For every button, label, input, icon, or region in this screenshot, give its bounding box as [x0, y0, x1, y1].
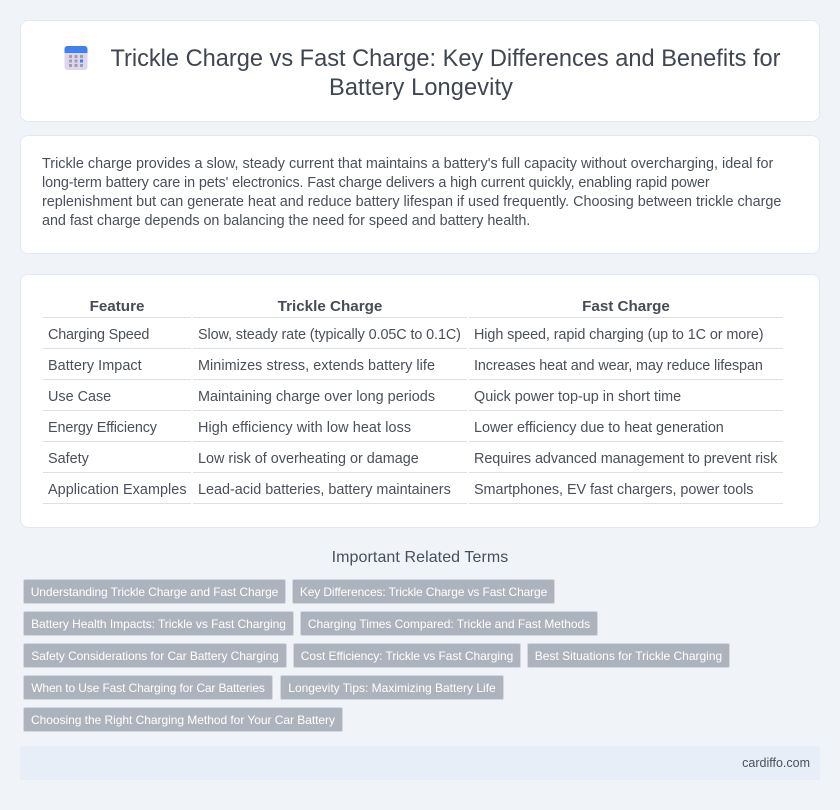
row: energy efficiency	[48, 420, 724, 436]
text block: introduction: long-term battery care in pets' electronics. Fast charge delivers a high current quickly, enabling rapid power	[42, 175, 710, 191]
row: use case	[48, 389, 681, 405]
table header: Trickle Charge	[278, 298, 382, 315]
row: battery impact: Battery Impact	[48, 358, 142, 374]
tag: Best Situations for Trickle Charging	[535, 649, 722, 663]
tag: Battery Health Impacts: Trickle vs Fast Charging	[31, 617, 286, 631]
row: energy efficiency: High efficiency with low heat loss	[198, 420, 411, 436]
panel: introduction	[20, 135, 820, 254]
footer credit: cardiffo.com	[742, 756, 810, 770]
row: use case: Quick power top-up in short time	[474, 389, 681, 405]
row: charging speed: Charging Speed	[48, 327, 149, 343]
tag	[527, 643, 730, 668]
tag	[23, 611, 294, 636]
tag	[23, 675, 273, 700]
text block: introduction: and fast charge depends on balancing the need for speed and battery health.	[42, 213, 530, 229]
tag	[23, 643, 287, 668]
tag	[293, 643, 521, 668]
table header: Feature	[90, 298, 144, 315]
tag: When to Use Fast Charging for Car Batteries	[31, 681, 265, 695]
tag	[292, 579, 555, 604]
tag: Safety Considerations for Car Battery Charging	[31, 649, 279, 663]
row: application examples: Lead-acid batteries, battery maintainers	[198, 482, 451, 498]
tag	[23, 579, 286, 604]
tag: Understanding Trickle Charge and Fast Charge	[31, 585, 278, 599]
tag: Cost Efficiency: Trickle vs Fast Charging	[301, 649, 513, 663]
tag	[300, 611, 598, 636]
table header: Fast Charge	[582, 298, 670, 315]
row: energy efficiency: Energy Efficiency	[48, 420, 157, 436]
row: battery impact: Increases heat and wear, may reduce lifespan	[474, 358, 763, 374]
row: use case: Use Case	[48, 389, 111, 405]
row: charging speed	[48, 327, 764, 343]
icon: calendar	[64, 46, 88, 70]
tag list	[23, 579, 730, 732]
table header	[90, 298, 670, 315]
tag: Key Differences: Trickle Charge vs Fast Charge	[300, 585, 547, 599]
text block: introduction: Trickle charge provides a slow, steady current that maintains a battery's full capacity without overcharging, ideal for	[42, 156, 773, 172]
footer	[20, 746, 820, 780]
heading: important related terms: Important Related Terms	[332, 549, 508, 566]
row: battery impact: Minimizes stress, extends battery life	[198, 358, 435, 374]
panel: header	[20, 20, 820, 122]
row: safety: Requires advanced management to prevent risk	[474, 451, 777, 467]
row: use case: Maintaining charge over long periods	[198, 389, 435, 405]
row: safety	[48, 451, 778, 467]
row: safety: Safety	[48, 451, 89, 467]
row: safety: Low risk of overheating or damage	[198, 451, 419, 467]
tag: Longevity Tips: Maximizing Battery Life	[288, 681, 496, 695]
title	[110, 46, 781, 101]
row: application examples	[48, 482, 753, 498]
tag: Choosing the Right Charging Method for Your Car Battery	[31, 713, 335, 727]
text block: introduction: replenishment but can generate heat and reduce battery lifespan if used frequently. Choosing between trickle charge	[42, 194, 781, 210]
text block: introduction	[42, 156, 781, 229]
row: battery impact	[48, 358, 763, 374]
row: charging speed: Slow, steady rate (typically 0.05C to 0.1C)	[198, 327, 461, 343]
row: application examples: Smartphones, EV fast chargers, power tools	[474, 482, 753, 498]
title: Trickle Charge vs Fast Charge: Key Differences and Benefits for	[110, 46, 781, 72]
tag	[280, 675, 504, 700]
row: charging speed: High speed, rapid charging (up to 1C or more)	[474, 327, 764, 343]
row: application examples: Application Examples	[48, 482, 187, 498]
row: energy efficiency: Lower efficiency due to heat generation	[474, 420, 724, 436]
tag	[23, 707, 343, 732]
panel: comparison table	[20, 274, 820, 528]
tag: Charging Times Compared: Trickle and Fast Methods	[308, 617, 590, 631]
title: Battery Longevity	[329, 75, 513, 101]
